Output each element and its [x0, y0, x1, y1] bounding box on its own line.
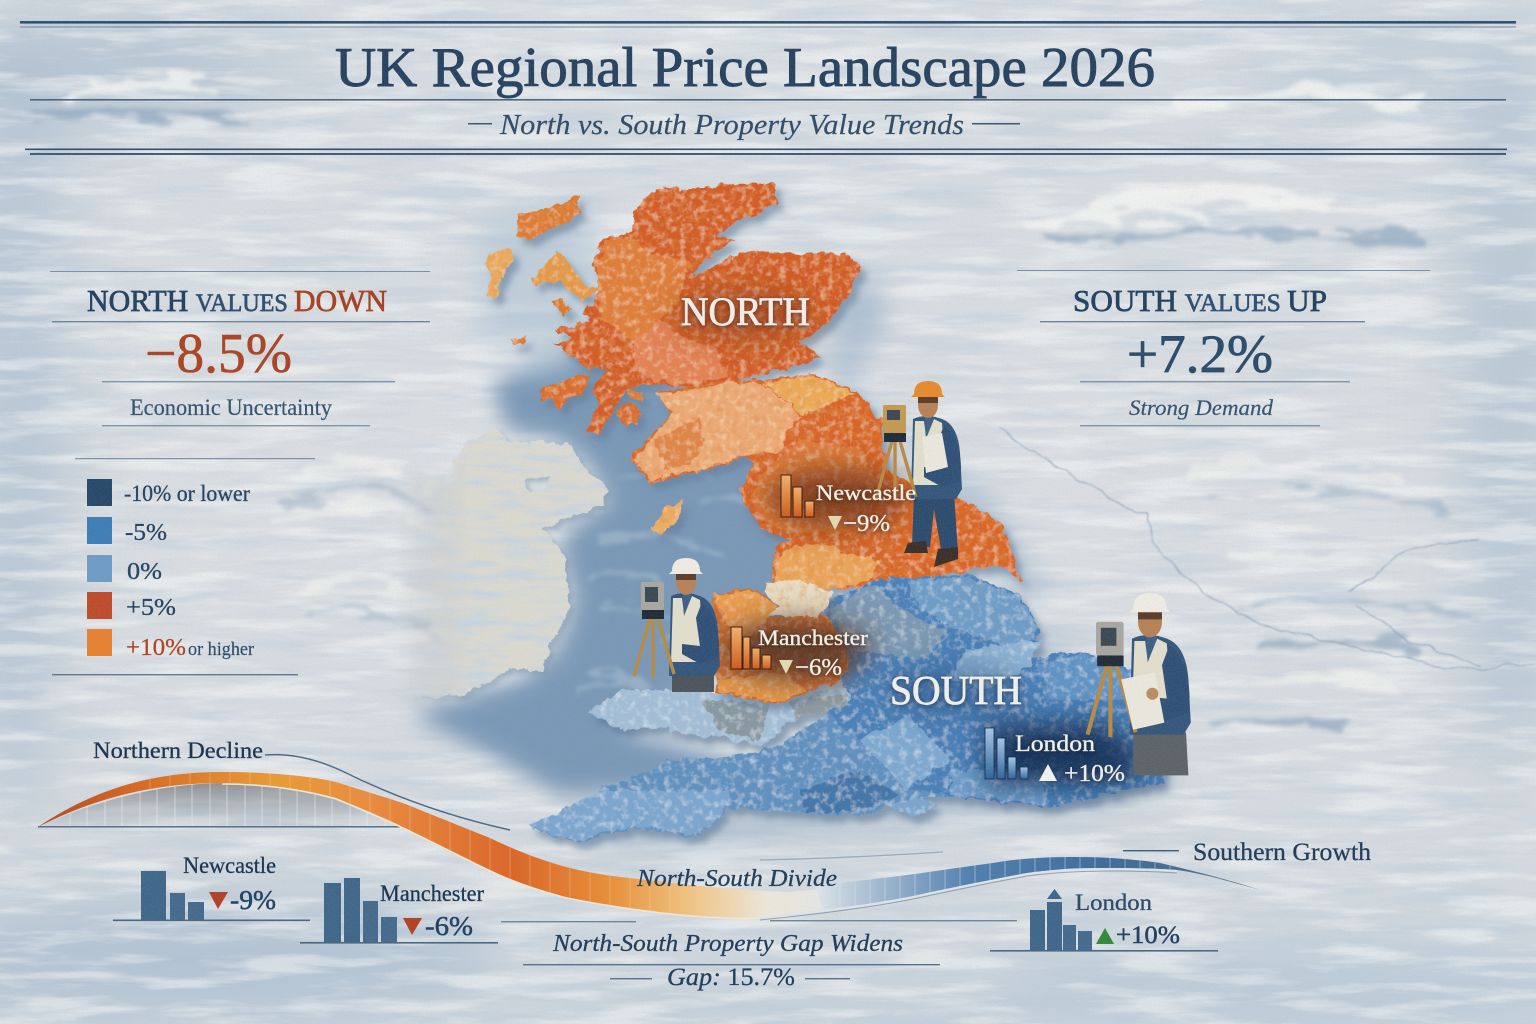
map callout: London	[985, 728, 1125, 787]
curve label: Southern Growth: Southern Growth	[1193, 839, 1372, 866]
map callout: Newcastle	[781, 475, 916, 537]
map callout: Manchester: −6%	[795, 655, 842, 681]
map: southern England and Wales	[529, 574, 1165, 843]
surveyor: London	[1088, 593, 1191, 775]
gap summary	[501, 920, 1017, 991]
mini chart: Manchester	[300, 878, 498, 944]
Midlands and south-east block	[824, 574, 1165, 808]
surveyor: Manchester	[634, 558, 720, 692]
sea around the British Isles	[410, 190, 1180, 850]
Wales	[587, 690, 850, 747]
mini chart: Newcastle: Newcastle	[183, 853, 276, 878]
mini chart: Newcastle: -9%	[230, 885, 276, 915]
mini chart: Manchester: Manchester	[380, 881, 484, 906]
divide curve	[38, 738, 1372, 920]
mini chart: London: +10%	[1116, 922, 1180, 949]
map: Manchester region	[713, 580, 850, 705]
map callout: Manchester	[731, 625, 869, 681]
map label: SOUTH: SOUTH	[890, 667, 1022, 713]
mini chart: Manchester: -6%	[425, 911, 473, 941]
legend: -10% or lower	[124, 481, 250, 506]
southern growth ribbon	[815, 857, 1260, 910]
map callout: Manchester: Manchester	[758, 625, 869, 650]
gap summary: North-South Property Gap Widens	[552, 931, 903, 957]
mini chart: London	[990, 889, 1218, 952]
map callout: London: +10%	[1064, 761, 1125, 787]
title: UK Regional Price Landscape 2026	[335, 37, 1155, 99]
gap summary: Gap: 15.7%	[667, 964, 795, 991]
islands	[516, 193, 580, 240]
legend: or higher	[188, 639, 255, 660]
panel: north values: −8.5%	[145, 323, 292, 385]
map: Scotland and northern England	[484, 183, 1022, 590]
legend: +5%	[126, 595, 176, 621]
map label: NORTH: NORTH	[681, 289, 810, 334]
panel: south values: +7.2%	[1127, 324, 1273, 384]
mini chart: Newcastle	[113, 853, 310, 921]
Isle of Wight	[888, 797, 938, 818]
south-west peninsula	[529, 713, 950, 843]
legend: -5%	[125, 520, 167, 546]
subtitle: North vs. South Property Value Trends	[499, 109, 964, 141]
legend: 0%	[127, 559, 162, 585]
curve label: Northern Decline: Northern Decline	[93, 738, 263, 763]
panel: south values	[1017, 270, 1430, 426]
panel: south values: SOUTH VALUES UP	[1073, 283, 1327, 318]
map callout: London: London	[1015, 731, 1096, 756]
panel: north values: NORTH VALUES DOWN	[87, 283, 387, 318]
map: Ireland	[395, 428, 608, 702]
hatched area under the northern arch	[38, 783, 425, 827]
curve label: North-South Divide: North-South Divide	[636, 866, 837, 892]
surveyor: Newcastle	[876, 381, 962, 567]
map callout: Newcastle: Newcastle	[816, 480, 916, 505]
title block	[20, 21, 1516, 155]
legend	[52, 458, 315, 675]
mainland north	[555, 183, 861, 436]
leader lines	[265, 755, 510, 830]
map callout: Newcastle: −9%	[843, 511, 890, 537]
northern decline ribbon	[38, 772, 830, 917]
panel: north values: Economic Uncertainty	[130, 395, 332, 420]
legend: +10%	[126, 635, 186, 661]
mini chart: London: London	[1075, 890, 1153, 915]
southern Scotland and northern England	[630, 373, 1022, 590]
panel: north values	[50, 271, 430, 426]
label shading patches	[675, 289, 1160, 785]
panel: south values: Strong Demand	[1129, 395, 1274, 420]
